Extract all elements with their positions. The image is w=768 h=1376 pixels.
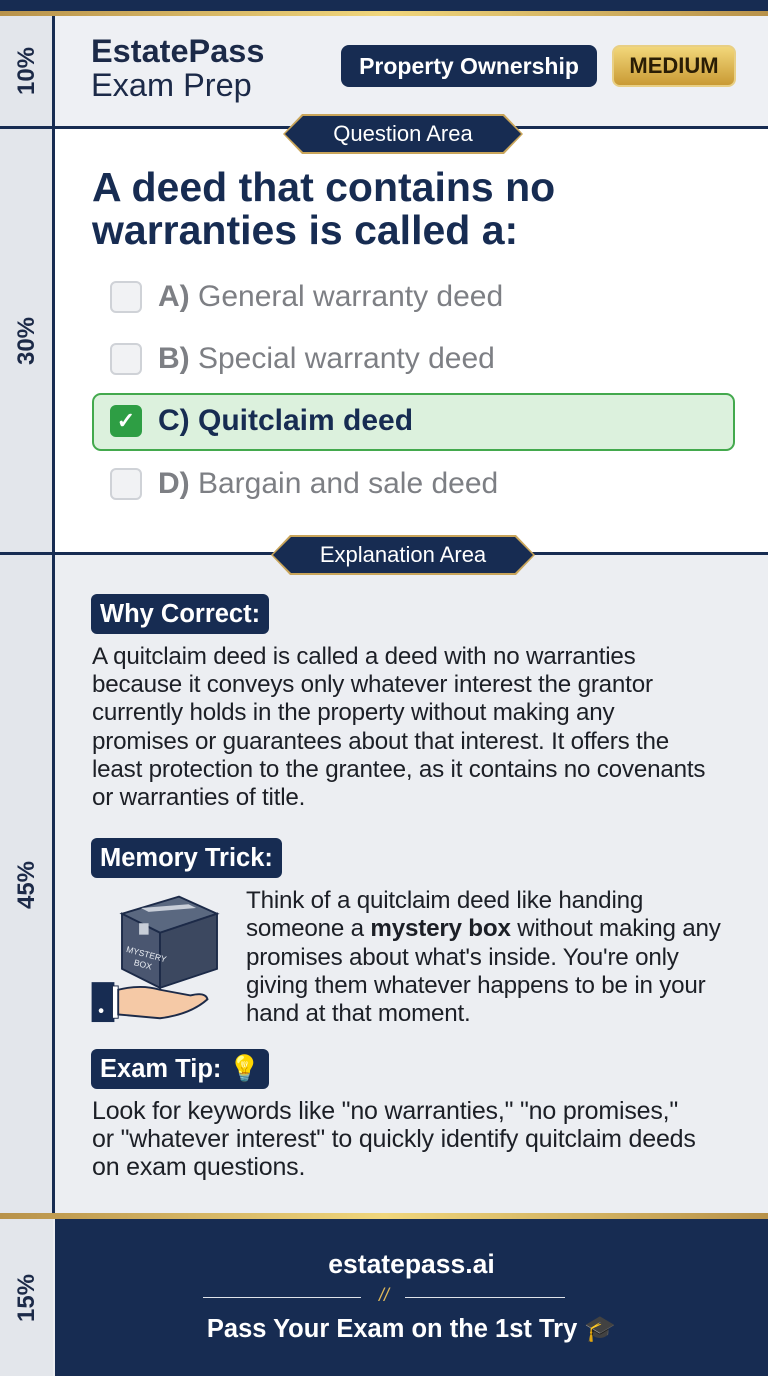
exam tip label: Exam Tip: 💡	[100, 1055, 260, 1083]
top navy bar	[0, 0, 768, 11]
difficulty badge: MEDIUM	[629, 53, 719, 78]
option D: Bargain and sale deed	[198, 467, 498, 500]
difficulty badge	[612, 45, 736, 87]
footer	[55, 1219, 768, 1376]
option A: A)	[158, 280, 190, 313]
text: 45%	[13, 861, 40, 909]
footer divider	[203, 1297, 361, 1298]
why correct text: A quitclaim deed is called a deed with no warranties	[92, 643, 636, 670]
memory trick text: someone a mystery box without making any	[246, 915, 721, 942]
question area tag: Question Area	[333, 121, 473, 146]
option A: General warranty deed	[198, 280, 503, 313]
explanation area tag: Explanation Area	[320, 542, 486, 567]
question area tag	[283, 114, 523, 154]
question title	[92, 164, 555, 253]
icon: mystery box with hand: BOX	[133, 957, 153, 972]
why correct text	[92, 643, 705, 811]
why correct label: Why Correct:	[100, 600, 260, 628]
exam tip text: on exam questions.	[92, 1153, 305, 1181]
explanation area tag	[271, 535, 535, 575]
why correct label	[91, 594, 269, 634]
category badge	[341, 45, 597, 87]
exam tip label	[91, 1049, 269, 1089]
memory trick text	[246, 887, 721, 1027]
why correct text: least protection to the grantee, as it contains no covenants	[92, 756, 705, 783]
footer url: estatepass.ai	[328, 1249, 495, 1279]
icon: mystery box with hand: MYSTERY	[125, 944, 168, 964]
why correct text: currently holds in the property without making any	[92, 699, 614, 726]
text: ✓	[117, 408, 135, 433]
left column	[0, 16, 53, 1376]
exam tip text: or "whatever interest" to quickly identify quitclaim deeds	[92, 1125, 696, 1153]
memory trick text: Think of a quitclaim deed like handing	[246, 887, 643, 914]
memory trick text: giving them whatever happens to be in your	[246, 972, 706, 999]
text: C) Quitclaim deed	[158, 404, 413, 437]
brand logo text	[91, 33, 264, 103]
option C correct	[92, 393, 735, 451]
brand logo text: EstatePass	[91, 33, 264, 69]
exam tip text: Look for keywords like "no warranties," "no promises,"	[92, 1097, 678, 1125]
text: 30%	[13, 317, 40, 365]
gold divider	[0, 1213, 768, 1219]
question title: A deed that contains no	[92, 164, 555, 210]
text: 15%	[13, 1274, 40, 1322]
header section	[55, 16, 768, 127]
why correct text: or warranties of title.	[92, 784, 305, 811]
option B: B)	[158, 342, 190, 375]
category badge: Property Ownership	[359, 53, 579, 79]
exam tip text	[92, 1097, 696, 1181]
memory trick label	[91, 838, 282, 878]
why correct text: because it conveys only whatever interest the grantor	[92, 671, 653, 698]
percent labels: 10%	[13, 47, 40, 95]
option D: D)	[158, 467, 190, 500]
question section bg	[55, 129, 768, 553]
brand logo text: Exam Prep	[91, 67, 252, 103]
question title: warranties is called a:	[92, 207, 518, 253]
footer tagline: Pass Your Exam on the 1st Try 🎓	[207, 1315, 616, 1343]
footer: //	[379, 1285, 389, 1305]
why correct text: promises or guarantees about that interest. It offers the	[92, 728, 669, 755]
option B: Special warranty deed	[198, 342, 495, 375]
memory trick text: promises about what's inside. You're only	[246, 944, 679, 971]
memory trick label: Memory Trick:	[100, 844, 273, 872]
icon: mystery box with hand	[92, 896, 220, 1022]
memory trick text: hand at that moment.	[246, 1000, 471, 1027]
